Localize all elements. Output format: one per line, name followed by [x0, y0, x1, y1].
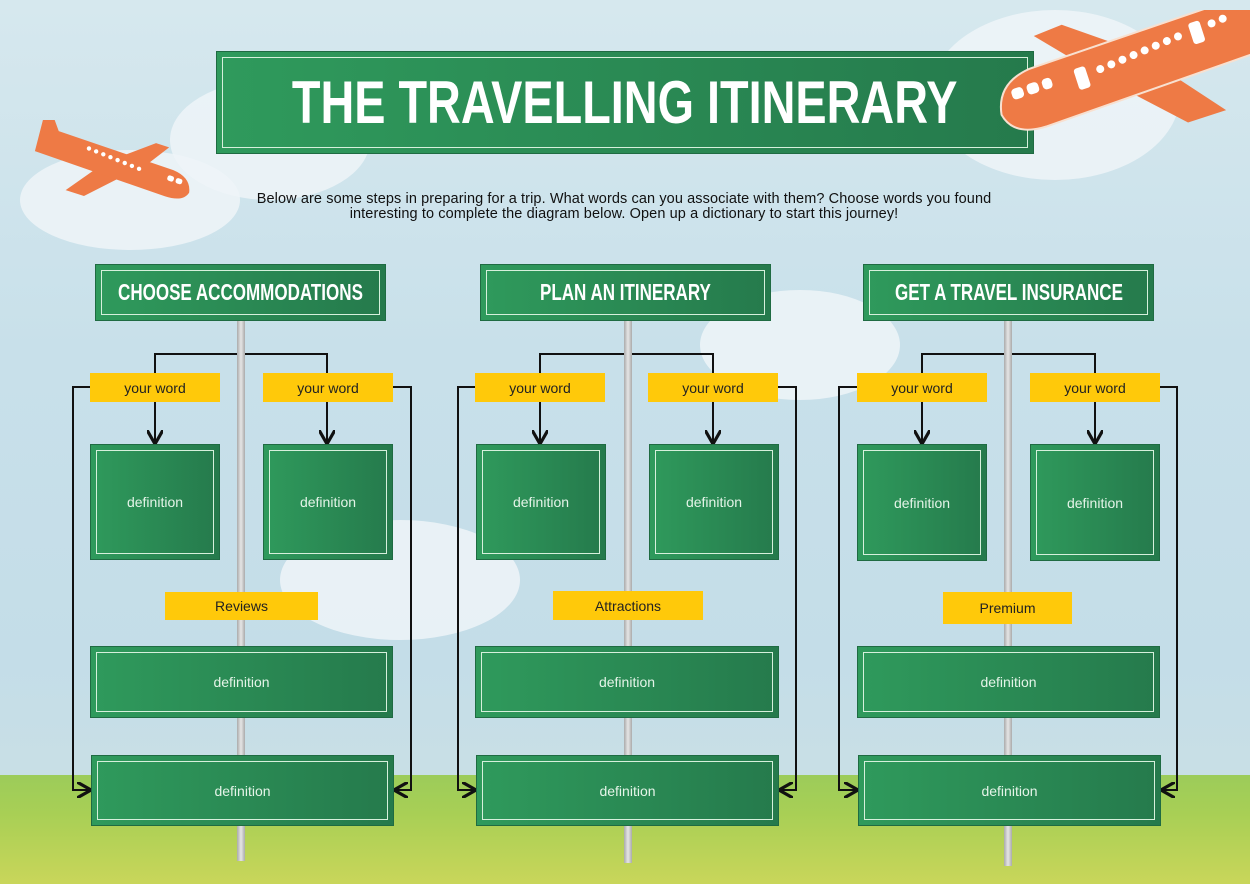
panel: choose accommodations: definition — [300, 494, 356, 510]
panel: plan an itinerary: your word — [509, 380, 571, 396]
heading: CHOOSE ACCOMMODATIONS — [118, 279, 363, 305]
panel: choose accommodations: definition — [214, 782, 271, 798]
title — [217, 52, 1033, 153]
icon: big plane — [1000, 10, 1250, 131]
panel: get a travel insurance: Premium — [979, 600, 1036, 616]
panel: choose accommodations — [90, 264, 394, 861]
panel: get a travel insurance: definition — [980, 674, 1037, 690]
panel: plan an itinerary: definition — [513, 494, 569, 510]
subtitle: Below are some steps in preparing for a trip. What words can you associate with them? Choose words you found — [257, 191, 991, 207]
heading — [481, 265, 770, 320]
heading — [864, 265, 1153, 320]
heading — [96, 265, 385, 320]
panel: plan an itinerary — [475, 264, 779, 863]
panel: choose accommodations: definition — [213, 674, 270, 690]
subtitle — [257, 191, 991, 222]
panel: plan an itinerary: Attractions — [595, 598, 661, 614]
panel: choose accommodations: your word — [124, 380, 186, 396]
panel: plan an itinerary: definition — [686, 494, 742, 510]
panel: get a travel insurance: definition — [894, 494, 950, 510]
panel: choose accommodations: Reviews — [215, 598, 268, 614]
panel: get a travel insurance: your word — [1064, 380, 1126, 396]
panel: get a travel insurance — [857, 264, 1161, 866]
heading: GET A TRAVEL INSURANCE — [895, 279, 1122, 305]
panel: choose accommodations: definition — [127, 494, 183, 510]
heading: PLAN AN ITINERARY — [540, 279, 711, 305]
panel: get a travel insurance: your word — [891, 380, 953, 396]
icon: small plane — [35, 120, 190, 198]
subtitle: interesting to complete the diagram below. Open up a dictionary to start this journey! — [350, 206, 898, 222]
panel: choose accommodations: your word — [297, 380, 359, 396]
panel: plan an itinerary: definition — [599, 674, 655, 690]
panel: get a travel insurance: definition — [1067, 494, 1123, 510]
title: THE TRAVELLING ITINERARY — [292, 69, 958, 136]
panel: plan an itinerary: definition — [599, 782, 656, 798]
panel: plan an itinerary: your word — [682, 380, 744, 396]
panel: get a travel insurance: definition — [981, 782, 1038, 798]
